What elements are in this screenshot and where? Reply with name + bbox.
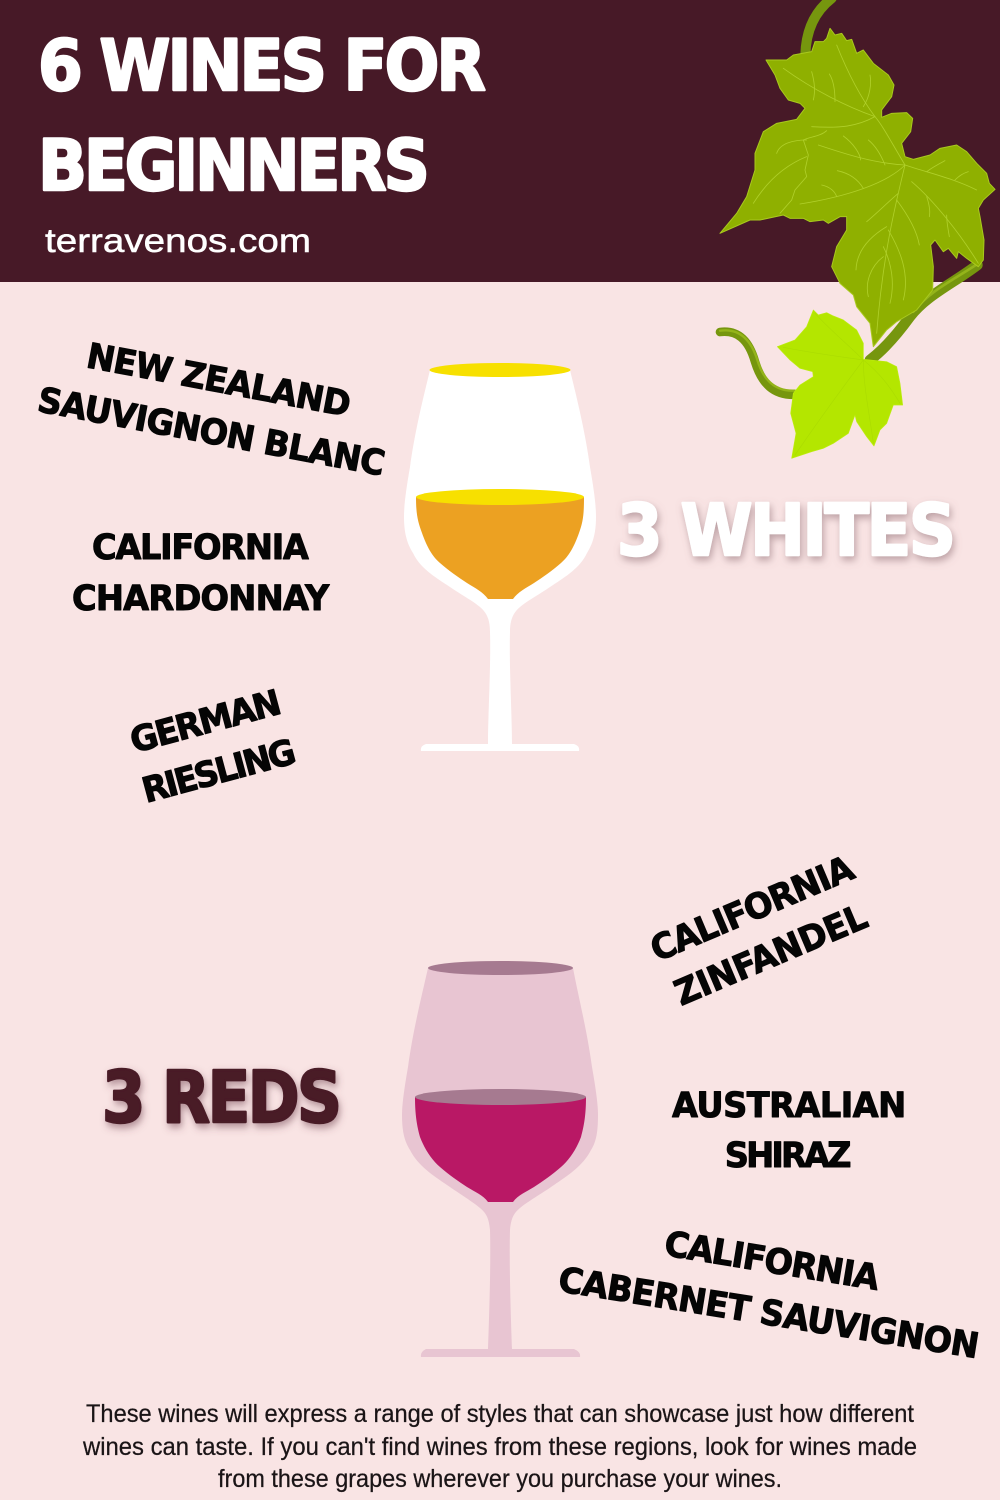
illustration: grape vine leaves bbox=[720, 0, 995, 458]
label: German Riesling: RIESLING bbox=[138, 732, 300, 812]
wine surface bbox=[415, 1089, 586, 1105]
label: California Zinfandel: ZINFANDEL bbox=[669, 897, 874, 1014]
label: California Chardonnay: CHARDONNAY bbox=[72, 578, 330, 619]
title: 6 WINES FOR bbox=[38, 25, 486, 107]
footer paragraph bbox=[82, 1400, 917, 1493]
label: California Zinfandel bbox=[645, 848, 874, 1014]
label: California Cabernet Sauvignon: CABERNET SAUVIGNON bbox=[556, 1260, 982, 1367]
glass body bbox=[404, 370, 596, 751]
label: California Zinfandel: CALIFORNIA bbox=[645, 848, 861, 970]
label: New Zealand Sauvignon Blanc: NEW ZEALAND bbox=[83, 336, 354, 426]
label: New Zealand Sauvignon Blanc: SAUVIGNON BLANC bbox=[34, 380, 388, 485]
label: German Riesling: GERMAN bbox=[126, 682, 286, 762]
label: Australian Shiraz: AUSTRALIAN bbox=[672, 1085, 906, 1126]
wine surface bbox=[416, 489, 584, 505]
label: German Riesling bbox=[126, 682, 300, 812]
red wine glass bbox=[402, 961, 598, 1357]
wine liquid bbox=[416, 497, 584, 599]
label: California Chardonnay bbox=[72, 527, 330, 619]
heading: 3 reds: 3 REDS bbox=[102, 1056, 342, 1139]
large leaf bbox=[720, 28, 995, 347]
rim bbox=[428, 961, 573, 975]
website: terravenos.com bbox=[45, 222, 311, 259]
footer paragraph: These wines will express a range of styles that can showcase just how different bbox=[86, 1400, 914, 1428]
heading: 3 whites: 3 WHITES bbox=[617, 490, 956, 573]
label: Australian Shiraz bbox=[672, 1085, 906, 1176]
title: BEGINNERS bbox=[38, 125, 430, 207]
wine liquid bbox=[415, 1097, 586, 1202]
label: California Cabernet Sauvignon: CALIFORNIA bbox=[662, 1224, 883, 1299]
footer paragraph: from these grapes wherever you purchase your wines. bbox=[218, 1465, 782, 1493]
white wine glass bbox=[404, 363, 596, 751]
header band bbox=[0, 0, 1000, 282]
label: Australian Shiraz: SHIRAZ bbox=[725, 1135, 852, 1176]
glass body bbox=[402, 968, 598, 1357]
footer paragraph: wines can taste. If you can't find wines from these regions, look for wines made bbox=[82, 1433, 917, 1461]
label: California Chardonnay: CALIFORNIA bbox=[92, 527, 309, 568]
small leaf bbox=[777, 310, 903, 458]
vine stems bbox=[720, 0, 978, 395]
title bbox=[38, 25, 486, 207]
rim bbox=[430, 363, 570, 377]
